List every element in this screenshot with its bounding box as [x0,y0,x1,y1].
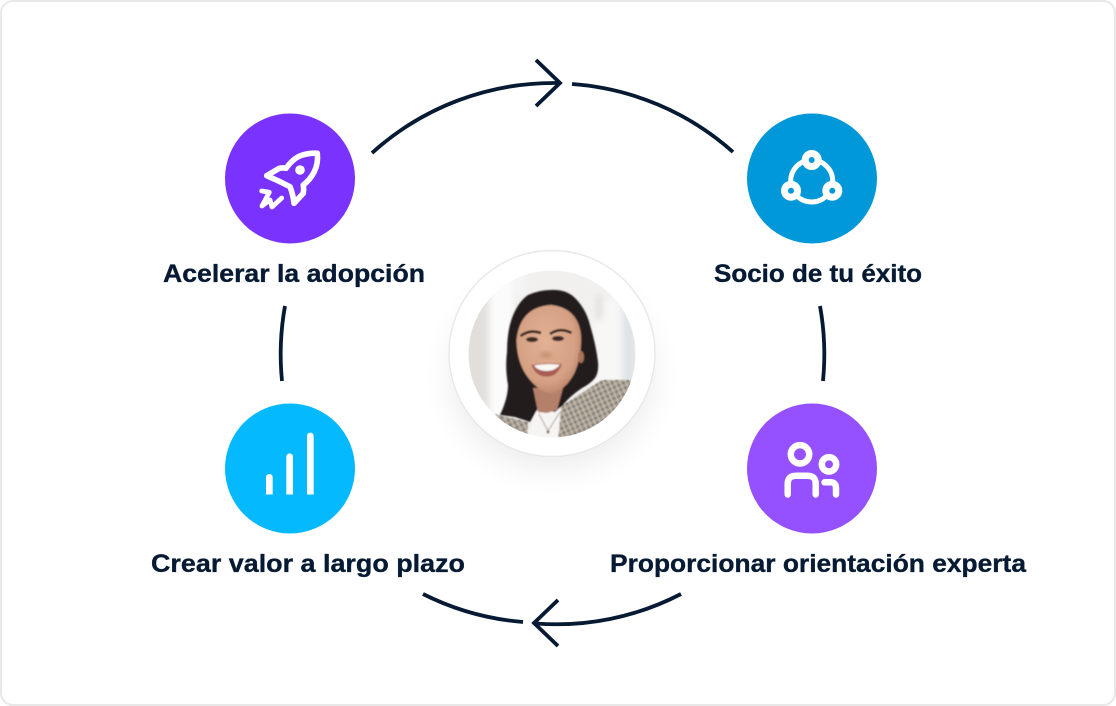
arrow: bottom arc [534,594,681,646]
mouth [532,363,562,377]
label: Crear valor a largo plazo: Crear valor a largo plazo [151,550,465,578]
connector: right arc [820,306,824,381]
step: Acelerar la adopción [163,114,425,288]
eyes [526,337,538,342]
necklace [539,412,560,431]
blazer [558,379,631,438]
label: Proporcionar orientación experta: Proporcionar orientación experta [610,550,1027,578]
shirt [531,407,562,438]
label: Acelerar la adopción: Acelerar la adopción [163,260,425,288]
step: Crear valor a largo plazo [151,404,465,578]
brows [520,332,541,336]
nose shadow [540,352,552,358]
face [516,305,581,393]
ear [578,351,584,363]
step: Socio de tu éxito [714,114,922,288]
connector: left arc [281,306,285,381]
icon: people [747,404,877,534]
label: Socio de tu éxito: Socio de tu éxito [714,260,922,288]
step: Proporcionar orientación experta [610,404,1027,578]
connector: bottom left arc [423,594,523,622]
arrow: top arc [372,60,560,153]
hair [500,290,598,422]
neck [533,388,563,413]
icon: rocket [225,114,355,244]
icon: network [747,114,877,244]
portrait: central photo [449,250,655,470]
icon: bar chart [225,404,355,534]
connector: top right arc [572,84,733,152]
